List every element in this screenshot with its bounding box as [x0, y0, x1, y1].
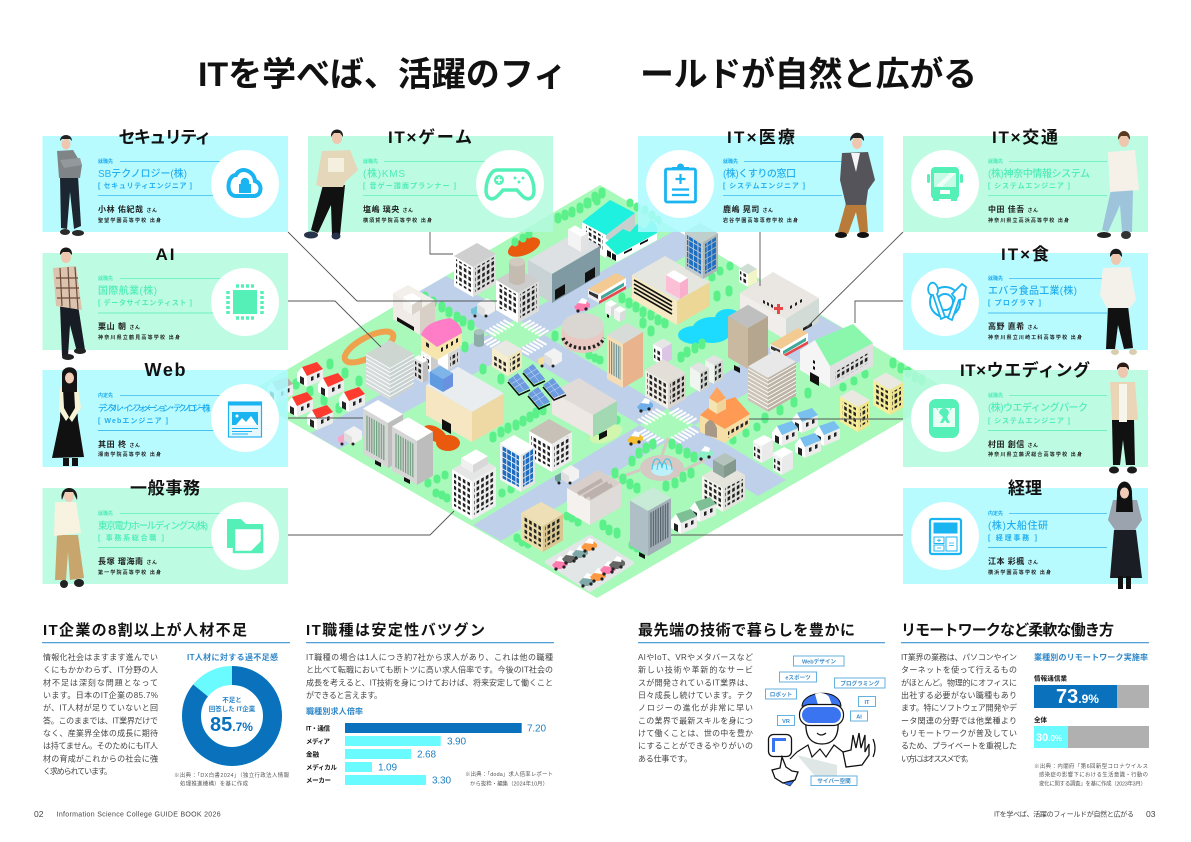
company details: 就職先 [98, 510, 113, 517]
title: ITを学べば、活躍のフィ [198, 56, 567, 94]
donut chart: 85.7% [210, 714, 253, 736]
body text: ータ関連の分野では他業種より [901, 715, 1017, 725]
park patch and ponds [340, 233, 741, 451]
building: cream small windowed [492, 340, 522, 376]
panel: Web [42, 360, 288, 467]
icon: bus [911, 150, 979, 218]
building: teal roof factory [582, 200, 635, 258]
company details: 神奈川県立高浜高等学校 出身 [988, 217, 1069, 224]
heading: 経理: 経理 [1008, 479, 1042, 498]
section: IT企業の8割以上が人材不足 [42, 621, 290, 788]
footer right: 03 [1146, 809, 1156, 819]
company details: SBテクノロジー(株) [98, 167, 187, 180]
source note [465, 770, 553, 788]
building: striped office [366, 340, 414, 400]
remote work chart: 全体 [1034, 715, 1048, 724]
body text [901, 652, 1017, 763]
icon: calculator [911, 502, 979, 570]
company details [988, 158, 1107, 224]
tag: サイバー空間: サイバー空間 [817, 777, 851, 785]
building: silo office [496, 258, 539, 323]
company details: 内定先 [988, 510, 1003, 517]
footer left: 02 [34, 809, 44, 819]
bar chart: 金融 [306, 750, 320, 758]
company details: デジタル・インフォメーション・テクノロジー(株) [98, 403, 211, 413]
panel: IT×食 [903, 245, 1148, 350]
panel: AI [42, 245, 288, 350]
bar chart: メディア [306, 736, 330, 746]
icon: cloud lock [211, 150, 279, 218]
source note: 変化に関する調査」を基に作成（2023年3月） [1039, 780, 1146, 788]
white small pair [753, 435, 793, 475]
heading: リモートワークなど柔軟な働き方 [901, 621, 1114, 639]
footer right [994, 809, 1156, 819]
body text: なく、産業界全体の成長に期待 [43, 728, 158, 738]
company details: 就職先 [98, 275, 113, 282]
building: gray stripe tall [630, 487, 671, 559]
person: accounting [1108, 482, 1142, 589]
illustration: VR headset person [766, 656, 885, 786]
building: white tower [393, 285, 435, 335]
company details: 聖望学園高等学校 出身 [98, 217, 161, 224]
company details: 中田 佳吾 さん [988, 204, 1038, 214]
body text: は持てません。そのためにもIT人 [43, 741, 158, 751]
building: blue window tower [685, 223, 718, 279]
body text: AIやIoT、VRやメタバースなど [638, 653, 753, 662]
company details [98, 158, 220, 224]
person: medical [835, 133, 875, 238]
body text: 新しい技術や革新的なサービ [638, 665, 753, 675]
building: tan tall [728, 305, 768, 373]
bar chart: 1.09 [378, 762, 397, 774]
building: cream big with blue box [426, 366, 504, 442]
building: large green side [552, 378, 617, 440]
company details [988, 275, 1107, 341]
company details: 就職先 [363, 158, 378, 165]
building: gray windowed office [454, 243, 496, 297]
source note [174, 771, 290, 788]
heading: Web: Web [144, 360, 186, 380]
company details: 神奈川県立川崎工科高等学校 出身 [988, 334, 1082, 341]
body text: 情報化社会はますます進んでい [43, 652, 158, 662]
company details: 栗山 朝 さん [98, 321, 140, 331]
building: gray roof dotted [529, 419, 572, 472]
red houses [267, 362, 365, 430]
icon: folder [211, 502, 279, 570]
company details: 小林 佑紀哉 さん [98, 204, 157, 214]
panel: IT×ウエディング [903, 360, 1148, 467]
building: lavender small [653, 338, 672, 365]
company details: [ システムエンジニア ] [988, 417, 1070, 425]
company details: 長塚 瑠海南 さん [98, 556, 157, 566]
body text: ある仕事です。 [638, 753, 692, 763]
body text: もリモートワークが普及してい [901, 728, 1017, 738]
company details [98, 392, 220, 458]
building: gray twin small [690, 355, 723, 392]
title [198, 55, 977, 94]
tank [474, 329, 484, 347]
body text: ノロジーの進化が非常に早い [638, 703, 753, 713]
company details: 就職先 [988, 275, 1003, 282]
donut chart: 回答した IT企業 [209, 704, 256, 713]
building: sawtooth factory [605, 220, 657, 262]
body text: く求められています。 [43, 766, 112, 776]
donut chart: 不足と [222, 696, 242, 704]
section: IT職種は安定性バツグン [306, 621, 554, 788]
company details: 村田 創信 さん [988, 439, 1038, 449]
building: orange striped tall [607, 323, 643, 388]
source note: 処理推進機構）を基に作成 [180, 780, 249, 788]
source note: 感染症の影響下における生活意識・行動の [1039, 770, 1148, 778]
company details: [ プログラマ ] [988, 298, 1041, 307]
building: church [700, 387, 750, 443]
panel: IT×交通 [903, 128, 1148, 232]
fountain plaza [618, 438, 705, 481]
icon: chip [211, 268, 279, 336]
trees [296, 191, 922, 553]
body text: います。日本のIT企業の85.7% [43, 690, 158, 700]
person: transport [1097, 131, 1139, 239]
body text: 成長を考えると、IT技術を身につけておけば、将来安定して働くこと [306, 677, 553, 687]
company details: 就職先 [988, 158, 1003, 165]
company details: 其田 柊 さん [98, 439, 140, 449]
body text: と比べて転職においても断トツに高い求人倍率です。今後のIT社会の [306, 665, 553, 675]
icon: clipboard [646, 150, 714, 218]
building: hospital [740, 272, 819, 343]
company details: 湘南学院高等学校 出身 [98, 451, 161, 458]
company details: 就職先 [98, 158, 113, 165]
building: beige striped [632, 256, 710, 325]
company details: (株)ウエディングパーク [988, 401, 1088, 414]
company details: [ セキュリティエンジニア ] [98, 182, 192, 190]
heading: セキュリティ: セキュリティ [118, 128, 212, 147]
company details: 国際航業(株) [98, 284, 157, 297]
bar chart: 3.90 [447, 736, 466, 748]
company details: [ システムエンジニア ] [988, 182, 1070, 190]
company details: [ Webエンジニア ] [98, 417, 168, 425]
company details: [ データサイエンティスト ] [98, 298, 192, 307]
company details [988, 392, 1107, 458]
company details: 横須賀学院高等学校 出身 [363, 217, 432, 224]
bus [770, 328, 808, 359]
company details: 岩谷学園高等専修学校 出身 [723, 217, 798, 224]
body text: 日々成長し続けています。テク [638, 690, 753, 700]
panel: 経理 [903, 479, 1148, 584]
company details: 塩嶋 璃央 さん [363, 204, 413, 214]
body text: この業界で最新スキルを身につ [638, 715, 753, 725]
company details: [ 音ゲー譜面プランナー ] [363, 181, 456, 190]
isometric city map [244, 185, 952, 598]
company details: (株)KMS [363, 167, 405, 180]
bar chart: メーカー [306, 776, 331, 784]
remote work chart [1034, 652, 1149, 748]
building: warehouse with roof stripes [567, 470, 621, 525]
company details: 第一学院高等学校 出身 [98, 569, 161, 576]
source note: から抜粋・編集（2024年10月） [470, 780, 548, 788]
person: web engineer [52, 367, 84, 466]
body text: IT職種の場合は1人につき約7社から求人があり、これは他の職種 [306, 652, 553, 662]
tag: AI: AI [856, 714, 862, 720]
building: gray horizontal striped [748, 350, 796, 412]
bar chart: 職種別求人倍率 [306, 706, 363, 716]
tag: eスポーツ: eスポーツ [785, 674, 811, 682]
building: beige windowed [645, 359, 686, 409]
body text: るため、プライベートを重視した [901, 741, 1017, 751]
panel: IT×ゲーム [308, 128, 553, 232]
panel: 一般事務 [42, 479, 288, 584]
bus [588, 273, 626, 304]
building: green roof barn [800, 324, 873, 388]
building: windowed with gray green box [702, 453, 745, 512]
building: tan windowed [521, 502, 563, 552]
company details [988, 510, 1107, 576]
company details: [ 経理事務 ] [988, 533, 1037, 542]
company details: 江本 彩楓 さん [988, 556, 1038, 566]
company details: 就職先 [988, 392, 1003, 399]
bar chart: 7.20 [527, 724, 546, 734]
body text: くにもかかわらず、IT分野の人 [43, 665, 158, 675]
company details: エバラ食品工業(株) [988, 284, 1077, 297]
person: food [1100, 249, 1137, 355]
body text: がほとんど。物理的にオフィスに [901, 677, 1017, 687]
source note: ※出典：「doda」求人倍率レポート [465, 770, 553, 778]
company details [98, 275, 220, 341]
heading: IT企業の8割以上が人材不足 [43, 621, 247, 639]
building: white tall windowed [452, 449, 496, 520]
person: office worker [54, 488, 84, 588]
tag: プログラミング: プログラミング [840, 680, 880, 688]
company details: [ 事務系総合職 ] [98, 533, 164, 542]
section: リモートワークなど柔軟な働き方 [901, 621, 1149, 788]
company details [363, 158, 485, 224]
company details: 東京電力ホールディングス(株) [98, 520, 208, 532]
body text: が、IT人材が足りていないと回 [43, 703, 158, 713]
vehicles [338, 298, 713, 588]
building: small white group [414, 341, 460, 383]
body text: ができると言えます。 [306, 690, 382, 700]
tag: VR: VR [782, 719, 790, 725]
tag: ロボット: ロボット [770, 690, 792, 698]
building: round hall [562, 313, 604, 353]
bar chart: 3.30 [432, 776, 451, 786]
body text: 材の育成がこれからの社会に強 [43, 753, 158, 763]
bar chart: 2.68 [417, 750, 436, 760]
title: ールドが自然と広がる [640, 55, 977, 94]
body text: ターネットを使って行えるもの [901, 665, 1017, 675]
source note: ※出典：「DX白書2024」（独立行政法人情報 [174, 771, 290, 779]
company details: 横浜学園高等学校 出身 [988, 569, 1051, 576]
heading: IT×ウエディング: IT×ウエディング [960, 360, 1090, 380]
remote work chart: 30.0% [1036, 732, 1062, 744]
parking lot [547, 537, 632, 590]
source note: ※出典：内閣府「第6回新型コロナウイルス [1034, 762, 1148, 770]
heading: 一般事務: 一般事務 [130, 479, 200, 498]
body text: スが開発されているIT業界は、 [638, 677, 753, 687]
twin green window towers [363, 400, 433, 485]
leader lines [288, 232, 903, 535]
body text [43, 652, 158, 776]
green roof houses [671, 497, 716, 534]
body text: い方にはオススメです。 [901, 753, 973, 763]
blue roof houses [772, 408, 840, 458]
body text: にすることができるやりがいの [638, 741, 753, 751]
company details: 就職先 [723, 158, 738, 165]
heading: IT×医療: IT×医療 [727, 128, 795, 147]
footer right: ITを学べば、活躍のフィールドが自然と広がる [994, 810, 1134, 818]
person: AI [53, 248, 86, 360]
company details: 内定先 [98, 392, 113, 399]
remote work chart: 業種別のリモートワーク実施率 [1034, 652, 1148, 662]
building: warehouse with roof box [528, 225, 600, 303]
icon: plate and cutlery [911, 268, 979, 336]
body text: けて働くことは、世の中を豊か [638, 728, 753, 738]
bar chart: メディカル [306, 762, 338, 772]
heading: IT×食: IT×食 [1001, 245, 1049, 264]
crosswalks [483, 320, 698, 445]
remote work chart: 73.9% [1056, 686, 1099, 708]
donut chart: IT人材に対する過不足感 [187, 652, 278, 662]
icon: ring box [911, 384, 979, 452]
ground [244, 185, 952, 598]
company details: 神奈川県立鶴見高等学校 出身 [98, 334, 180, 341]
heading: IT職種は安定性バツグン [306, 621, 485, 639]
building: small pair [605, 300, 626, 322]
donut chart [187, 652, 278, 756]
person: wedding [1109, 362, 1138, 474]
company details: (株)大船住研 [988, 519, 1048, 532]
company details: (株)神奈中情報システム [988, 167, 1090, 180]
building: yellow pair [840, 372, 903, 432]
body text: IT業界の業務は、パソコンやイン [901, 652, 1017, 662]
roads [311, 230, 849, 541]
person: security engineer [57, 135, 84, 236]
icon: game controller [476, 150, 544, 218]
panel: セキュリティ [42, 128, 288, 232]
building: pink roof [421, 318, 462, 360]
heading: IT×ゲーム: IT×ゲーム [388, 128, 472, 147]
company details: 神奈川県立藤沢総合高等学校 出身 [988, 451, 1082, 458]
solar panels [508, 364, 566, 409]
panel: IT×医療 [638, 128, 883, 232]
source note [1034, 762, 1148, 788]
icon: browser window [211, 384, 279, 452]
company details: (株)くすりの窓口 [723, 167, 796, 180]
building: small cream [739, 264, 757, 287]
heading: IT×交通: IT×交通 [992, 128, 1058, 147]
company details: 鹿嶋 晃司 さん [723, 204, 773, 214]
body text [306, 652, 553, 700]
tag: Webデザイン: Webデザイン [802, 658, 836, 666]
body text: 答。このままでは、IT業界だけで [43, 715, 158, 725]
person: game planner [304, 130, 358, 240]
company details: [ システムエンジニア ] [723, 182, 805, 190]
company details: 高野 直希 さん [988, 321, 1038, 331]
footer left [34, 809, 221, 819]
building: blue window white [500, 435, 535, 492]
company details [98, 510, 220, 576]
section: 最先端の技術で暮らしを豊かに [638, 621, 885, 786]
bar chart [306, 706, 546, 786]
bar chart: IT・通信 [306, 724, 330, 732]
remote work chart: 情報通信業 [1034, 674, 1068, 682]
footer left: Information Science College GUIDE BOOK 2026 [57, 812, 221, 818]
tag: IT: IT [865, 700, 870, 706]
heading: 最先端の技術で暮らしを豊かに [638, 621, 855, 639]
company details [723, 158, 842, 224]
body text: ます。特にソフトウェア開発やデ [901, 703, 1017, 713]
body text [638, 653, 753, 763]
body text: 出社する必要がない職種もあり [901, 690, 1017, 700]
body text: 材不足は深刻な問題となって [43, 677, 158, 687]
heading: AI: AI [156, 245, 174, 264]
